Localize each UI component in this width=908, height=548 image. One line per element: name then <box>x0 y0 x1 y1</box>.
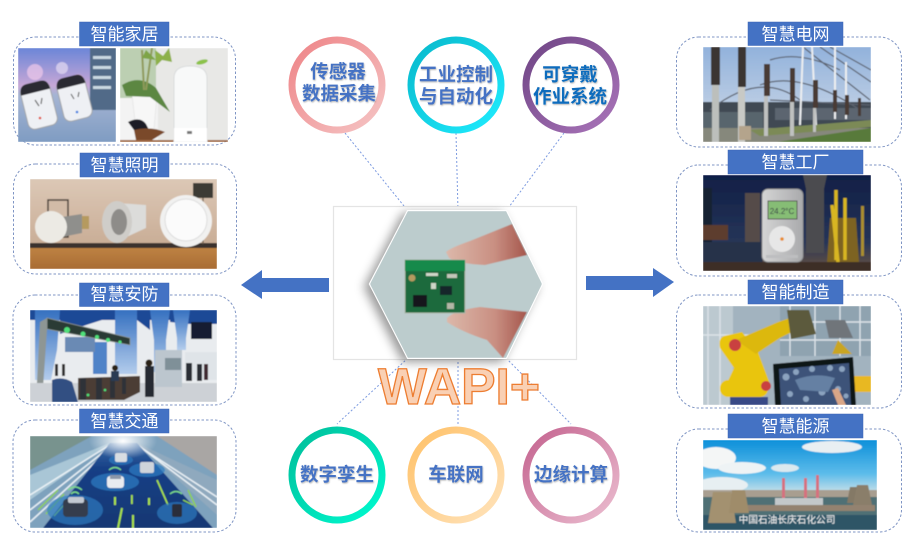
image: connected cars road <box>30 436 217 528</box>
label: smart lighting <box>80 153 169 177</box>
connector lines from hub to circles <box>337 133 571 424</box>
label: smart manufacturing <box>748 280 843 304</box>
label: smart manufacturing: 智能制造 <box>762 283 830 302</box>
circle: industrial control and automation: 与自动化 <box>419 86 493 107</box>
circle: sensor data collection: 传感器 <box>310 61 366 82</box>
circle: digital twin: 数字孪生 <box>300 464 374 485</box>
label: smart grid <box>748 22 843 46</box>
arrow: left <box>241 270 329 299</box>
circle: edge computing: 边缘计算 <box>534 464 608 485</box>
image: air purifier room <box>120 48 228 142</box>
label: smart security <box>80 283 169 306</box>
center module photo frame <box>334 206 576 360</box>
circle: internet of vehicles <box>411 430 501 520</box>
label: smart grid: 智慧电网 <box>762 25 830 44</box>
image: robot arm and tablet <box>703 306 871 405</box>
circle: wearable work system <box>526 40 616 130</box>
label: smart home: 智能家居 <box>90 25 158 44</box>
panel: smart lighting <box>14 153 236 274</box>
circle: wearable work system: 作业系统 <box>533 86 607 107</box>
label: smart energy: 智慧能源 <box>762 417 830 436</box>
circle: sensor data collection <box>292 40 382 130</box>
label: smart energy <box>728 414 863 438</box>
image: light fixtures <box>30 179 217 269</box>
image: station security gates <box>30 310 217 402</box>
panel: smart security <box>13 283 236 405</box>
image: thermometer device at refinery: 24.2°C <box>770 207 794 216</box>
circle: wearable work system: 可穿戴 <box>542 64 598 85</box>
label: smart traffic: 智慧交通 <box>90 412 158 431</box>
title: WAPI+: WAPI+ <box>378 358 540 415</box>
panel: smart factory <box>676 150 902 276</box>
label: smart home <box>80 22 169 46</box>
panel: smart traffic <box>13 409 236 532</box>
circle: industrial control and automation: 工业控制 <box>419 64 493 85</box>
panel: smart grid <box>676 22 902 147</box>
panel: smart home <box>14 22 236 145</box>
circle: internet of vehicles: 车联网 <box>428 464 484 485</box>
arrow: right <box>586 268 674 297</box>
image: power substation <box>703 47 871 142</box>
label: smart lighting: 智慧照明 <box>90 156 158 175</box>
image: petrochemical plant: 中国石油长庆石化公司 <box>739 513 835 526</box>
circle: industrial control and automation <box>411 40 501 130</box>
circle: digital twin <box>292 430 382 520</box>
panel: smart manufacturing <box>676 280 902 408</box>
label: smart traffic <box>80 409 169 433</box>
image: thermometer device at refinery <box>703 175 871 271</box>
label: smart security: 智慧安防 <box>90 285 158 304</box>
image: smart sockets <box>18 48 116 142</box>
label: smart factory <box>728 150 863 174</box>
panel: smart energy <box>676 414 902 532</box>
hexagon: WAPI module held by fingers <box>370 211 542 358</box>
image: petrochemical plant <box>696 440 877 530</box>
circle: sensor data collection: 数据采集 <box>302 83 376 104</box>
label: smart factory: 智慧工厂 <box>762 153 830 172</box>
circle: edge computing <box>526 430 616 520</box>
